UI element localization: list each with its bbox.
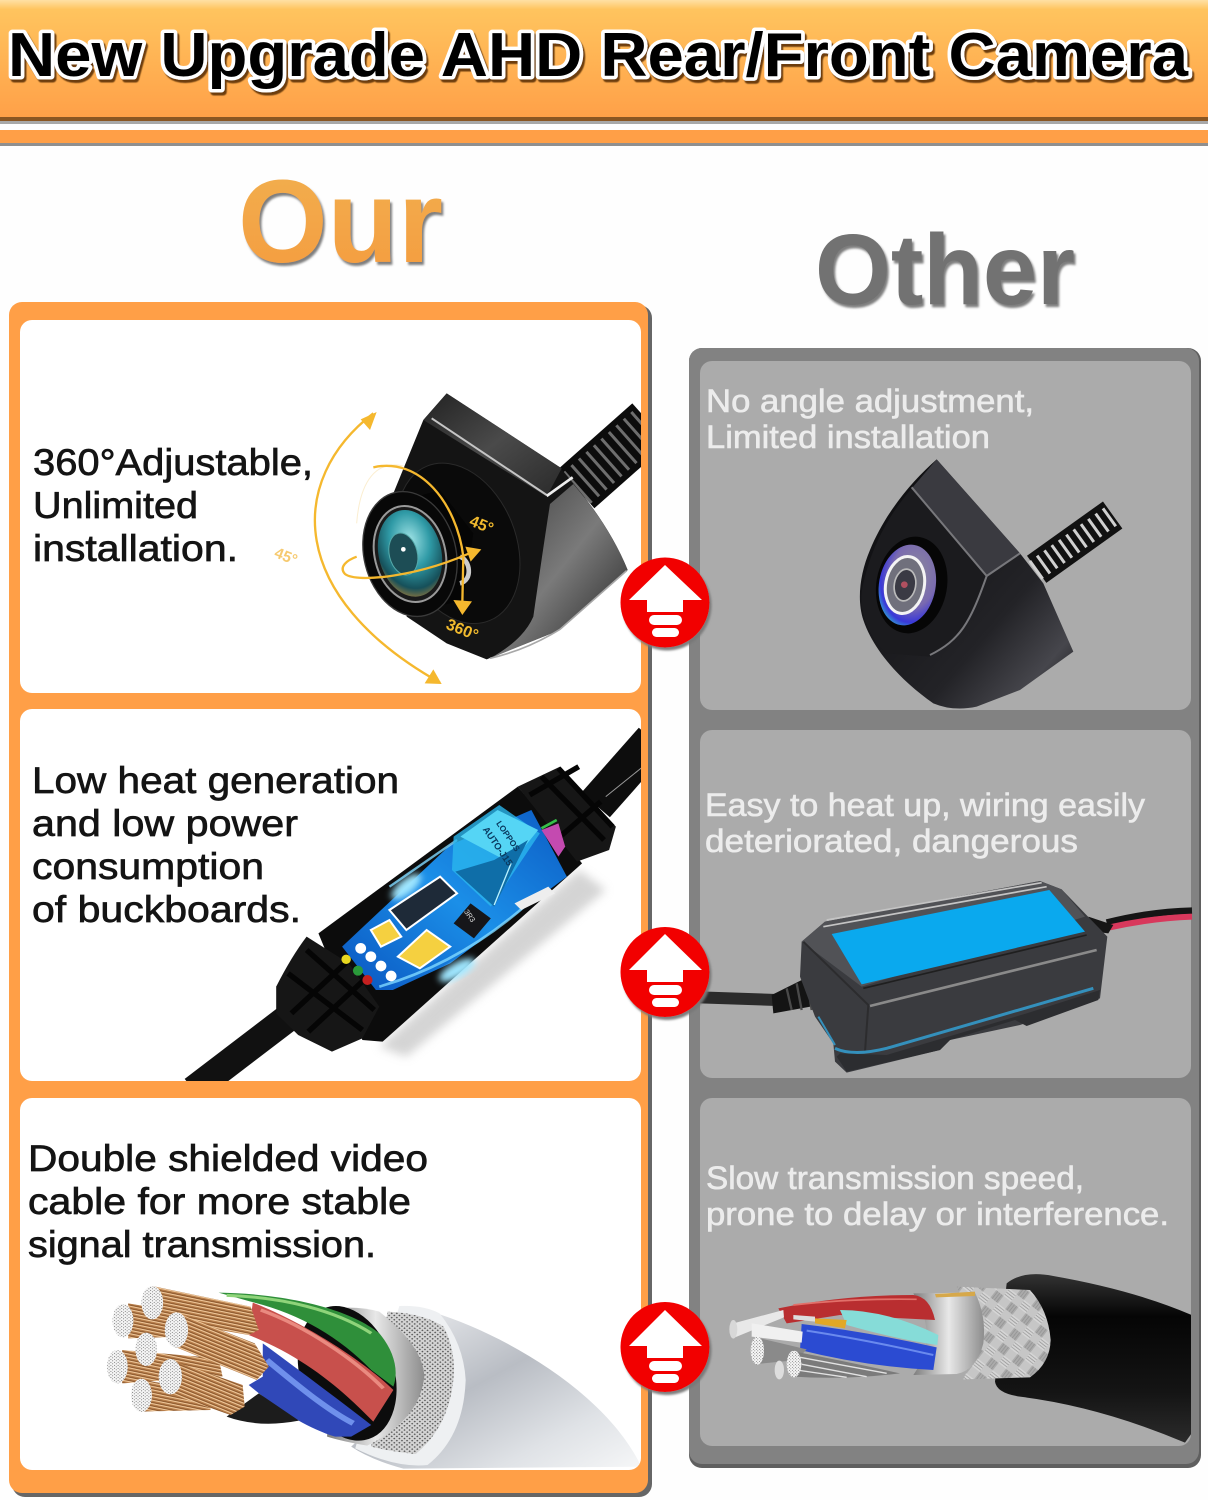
- image: adjustable black camera: [272, 393, 650, 684]
- header banner: [0, 0, 1208, 146]
- label: 45 degrees: 45°: [467, 513, 496, 538]
- chip label: 3R3: [462, 908, 477, 924]
- card: buckboard: [20, 709, 653, 1090]
- image: black shielded cable: [729, 1274, 1192, 1443]
- text: 360 adjustable: [33, 442, 313, 569]
- text: 360 adjustable: Unlimited: [33, 485, 198, 526]
- icon: red up arrow badge 3: [620, 1302, 710, 1392]
- title: New Upgrade AHD Rear/Front Camera: [8, 21, 1189, 90]
- panel: other product: [689, 348, 1201, 1468]
- chip label: AUTO-J15: [481, 824, 515, 868]
- label: 45 degrees left: 45°: [272, 545, 300, 569]
- text: low heat: consumption: [32, 846, 264, 887]
- image: fixed black camera: [860, 459, 1115, 709]
- text: easy to heat up: [705, 787, 1145, 859]
- text: no angle: [706, 383, 1034, 455]
- card: easy to heat up: [700, 730, 1192, 1078]
- text: double shielded: [28, 1138, 428, 1265]
- text: easy to heat up: Easy to heat up, wiring easily: [705, 787, 1145, 823]
- image: transparent buckboard: [193, 740, 653, 1090]
- text: double shielded: Double shielded video: [28, 1138, 428, 1179]
- heading: Other: Other: [815, 214, 1075, 326]
- text: low heat: [32, 760, 399, 930]
- text: easy to heat up: deteriorated, dangerous: [705, 823, 1078, 859]
- image: white double-shielded cable: [107, 1286, 641, 1469]
- card: slow transmission: [700, 1098, 1192, 1446]
- text: low heat: of buckboards.: [32, 889, 301, 930]
- text: 360 adjustable: installation.: [33, 528, 238, 569]
- card: shielded cable: [20, 1098, 641, 1470]
- icon: red up arrow badge 2: [620, 927, 710, 1017]
- text: no angle: Limited installation: [706, 419, 990, 455]
- text: low heat: and low power: [32, 803, 298, 844]
- card: adjustable camera: [20, 320, 650, 693]
- text: 360 adjustable: 360°Adjustable,: [33, 442, 313, 483]
- heading: Our: Our: [238, 156, 443, 288]
- text: slow transmission: prone to delay or interference.: [706, 1196, 1169, 1232]
- image: black-and-blue converter: [700, 881, 1192, 1073]
- chip label: LOPPOS: [494, 819, 522, 854]
- text: slow transmission: [706, 1160, 1169, 1232]
- label: 360 degrees: 360°: [443, 616, 481, 644]
- card: no angle adjustment: [700, 361, 1191, 710]
- text: low heat: Low heat generation: [32, 760, 399, 801]
- text: slow transmission: Slow transmission speed,: [706, 1160, 1084, 1196]
- icon: red up arrow badge 1: [620, 558, 710, 648]
- panel: our product: [9, 302, 653, 1497]
- text: double shielded: signal transmission.: [28, 1224, 376, 1265]
- text: no angle: No angle adjustment,: [706, 383, 1034, 419]
- text: double shielded: cable for more stable: [28, 1181, 411, 1222]
